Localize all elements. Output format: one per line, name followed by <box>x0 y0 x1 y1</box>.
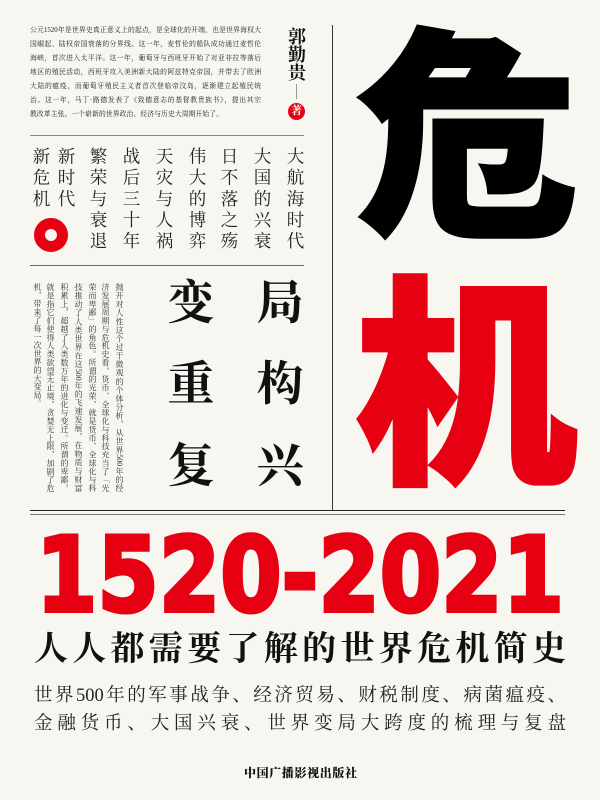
vertical body text: 技推动了人类世界在这500年的飞速发展，在物质与财富 <box>74 283 83 492</box>
table of contents columns: 日不落之殇 <box>219 147 239 253</box>
vertical rule <box>332 25 333 510</box>
middle rule <box>30 265 304 266</box>
table of contents columns: 战后三十年 <box>121 147 141 253</box>
keyword: 构: 构 <box>256 359 304 411</box>
keyword: 兴: 兴 <box>256 441 304 493</box>
table of contents columns: 新危机 <box>31 147 51 211</box>
vertical body text: 抛开对人性这个过于微观的个体分析，从世界500年的经 <box>115 283 124 492</box>
vertical body text: 荣而卑鄙」的角色。所谓的光荣，就是货币、全球化与科 <box>88 283 97 492</box>
vertical body text: 就是指它们使得人类欲望无止境，贪婪无上限，加剧了危 <box>46 283 55 492</box>
intro paragraph: 治。这一年，马丁·路德发表了《致德意志的基督教贵族书》，提出其宗 <box>30 97 261 104</box>
vertical body text: 积累上，超越了人类数万年的进化与变迁。所谓的卑鄙， <box>60 283 69 492</box>
table of contents columns <box>31 147 305 253</box>
author name: 郭勤贵 <box>286 27 306 81</box>
big title character: 机: 机 <box>355 265 577 513</box>
author seal: 著: 著 <box>291 105 302 117</box>
intro paragraph: 教改革主张。一个崭新的世界政治、经济与历史大周期开始了。 <box>30 111 223 118</box>
intro paragraph: 地区的殖民活动，西班牙攻入美洲新大陆的阿兹特克帝国，并带去了欧洲 <box>30 69 261 76</box>
table of contents columns: 大国的兴衰 <box>252 147 272 253</box>
intro paragraph: 公元1520年是世界史真正意义上的起点，是全球化的开端，也是世界海权大 <box>30 27 261 34</box>
description line 2: 金融货币、大国兴衰、世界变局大跨度的梳理与复盘 <box>34 714 566 734</box>
description line 1: 世界500年的军事战争、经济贸易、财税制度、病菌瘟疫、 <box>34 686 566 706</box>
intro paragraph: 海峡，首次进入太平洋。这一年，葡萄牙与西班牙开始了对亚非拉等落后 <box>30 55 261 62</box>
vertical body text <box>33 283 124 492</box>
keyword: 复: 复 <box>168 441 214 493</box>
author divider <box>296 84 297 99</box>
vertical body text: 济发展周期与危机史看，货币、全球化与科技充当了「光 <box>101 283 110 492</box>
intro paragraph: 大陆的瘟疫，而葡萄牙殖民主义者首次登临帝汶岛，逐渐建立起殖民统 <box>30 83 261 90</box>
vertical body text: 机，带来了每一次世界的大变局。 <box>33 283 42 408</box>
table of contents columns: 大航海时代 <box>285 147 305 253</box>
keyword: 重: 重 <box>168 359 214 411</box>
year range headline: 1520-2021 <box>36 516 564 636</box>
keyword: 局: 局 <box>256 278 304 330</box>
table of contents columns: 繁荣与衰退 <box>88 147 108 253</box>
keyword: 变: 变 <box>168 278 214 330</box>
big title character: 危: 危 <box>356 17 578 265</box>
intro paragraph <box>30 26 261 118</box>
author seal: 著 <box>288 103 305 120</box>
double horizontal rule <box>30 510 565 514</box>
intro paragraph: 国崛起、陆权帝国衰落的分界线。这一年，麦哲伦的船队成功通过麦哲伦 <box>30 41 261 48</box>
table of contents columns: 伟大的博弈 <box>187 147 207 253</box>
table of contents columns: 新时代 <box>56 147 76 211</box>
upper rule <box>30 134 304 136</box>
publisher: 中国广播影视出版社 <box>244 766 357 780</box>
table of contents columns: 天灾与人祸 <box>154 147 174 253</box>
subtitle: 人人都需要了解的世界危机简史 <box>34 631 566 668</box>
red ring icon <box>34 218 68 252</box>
